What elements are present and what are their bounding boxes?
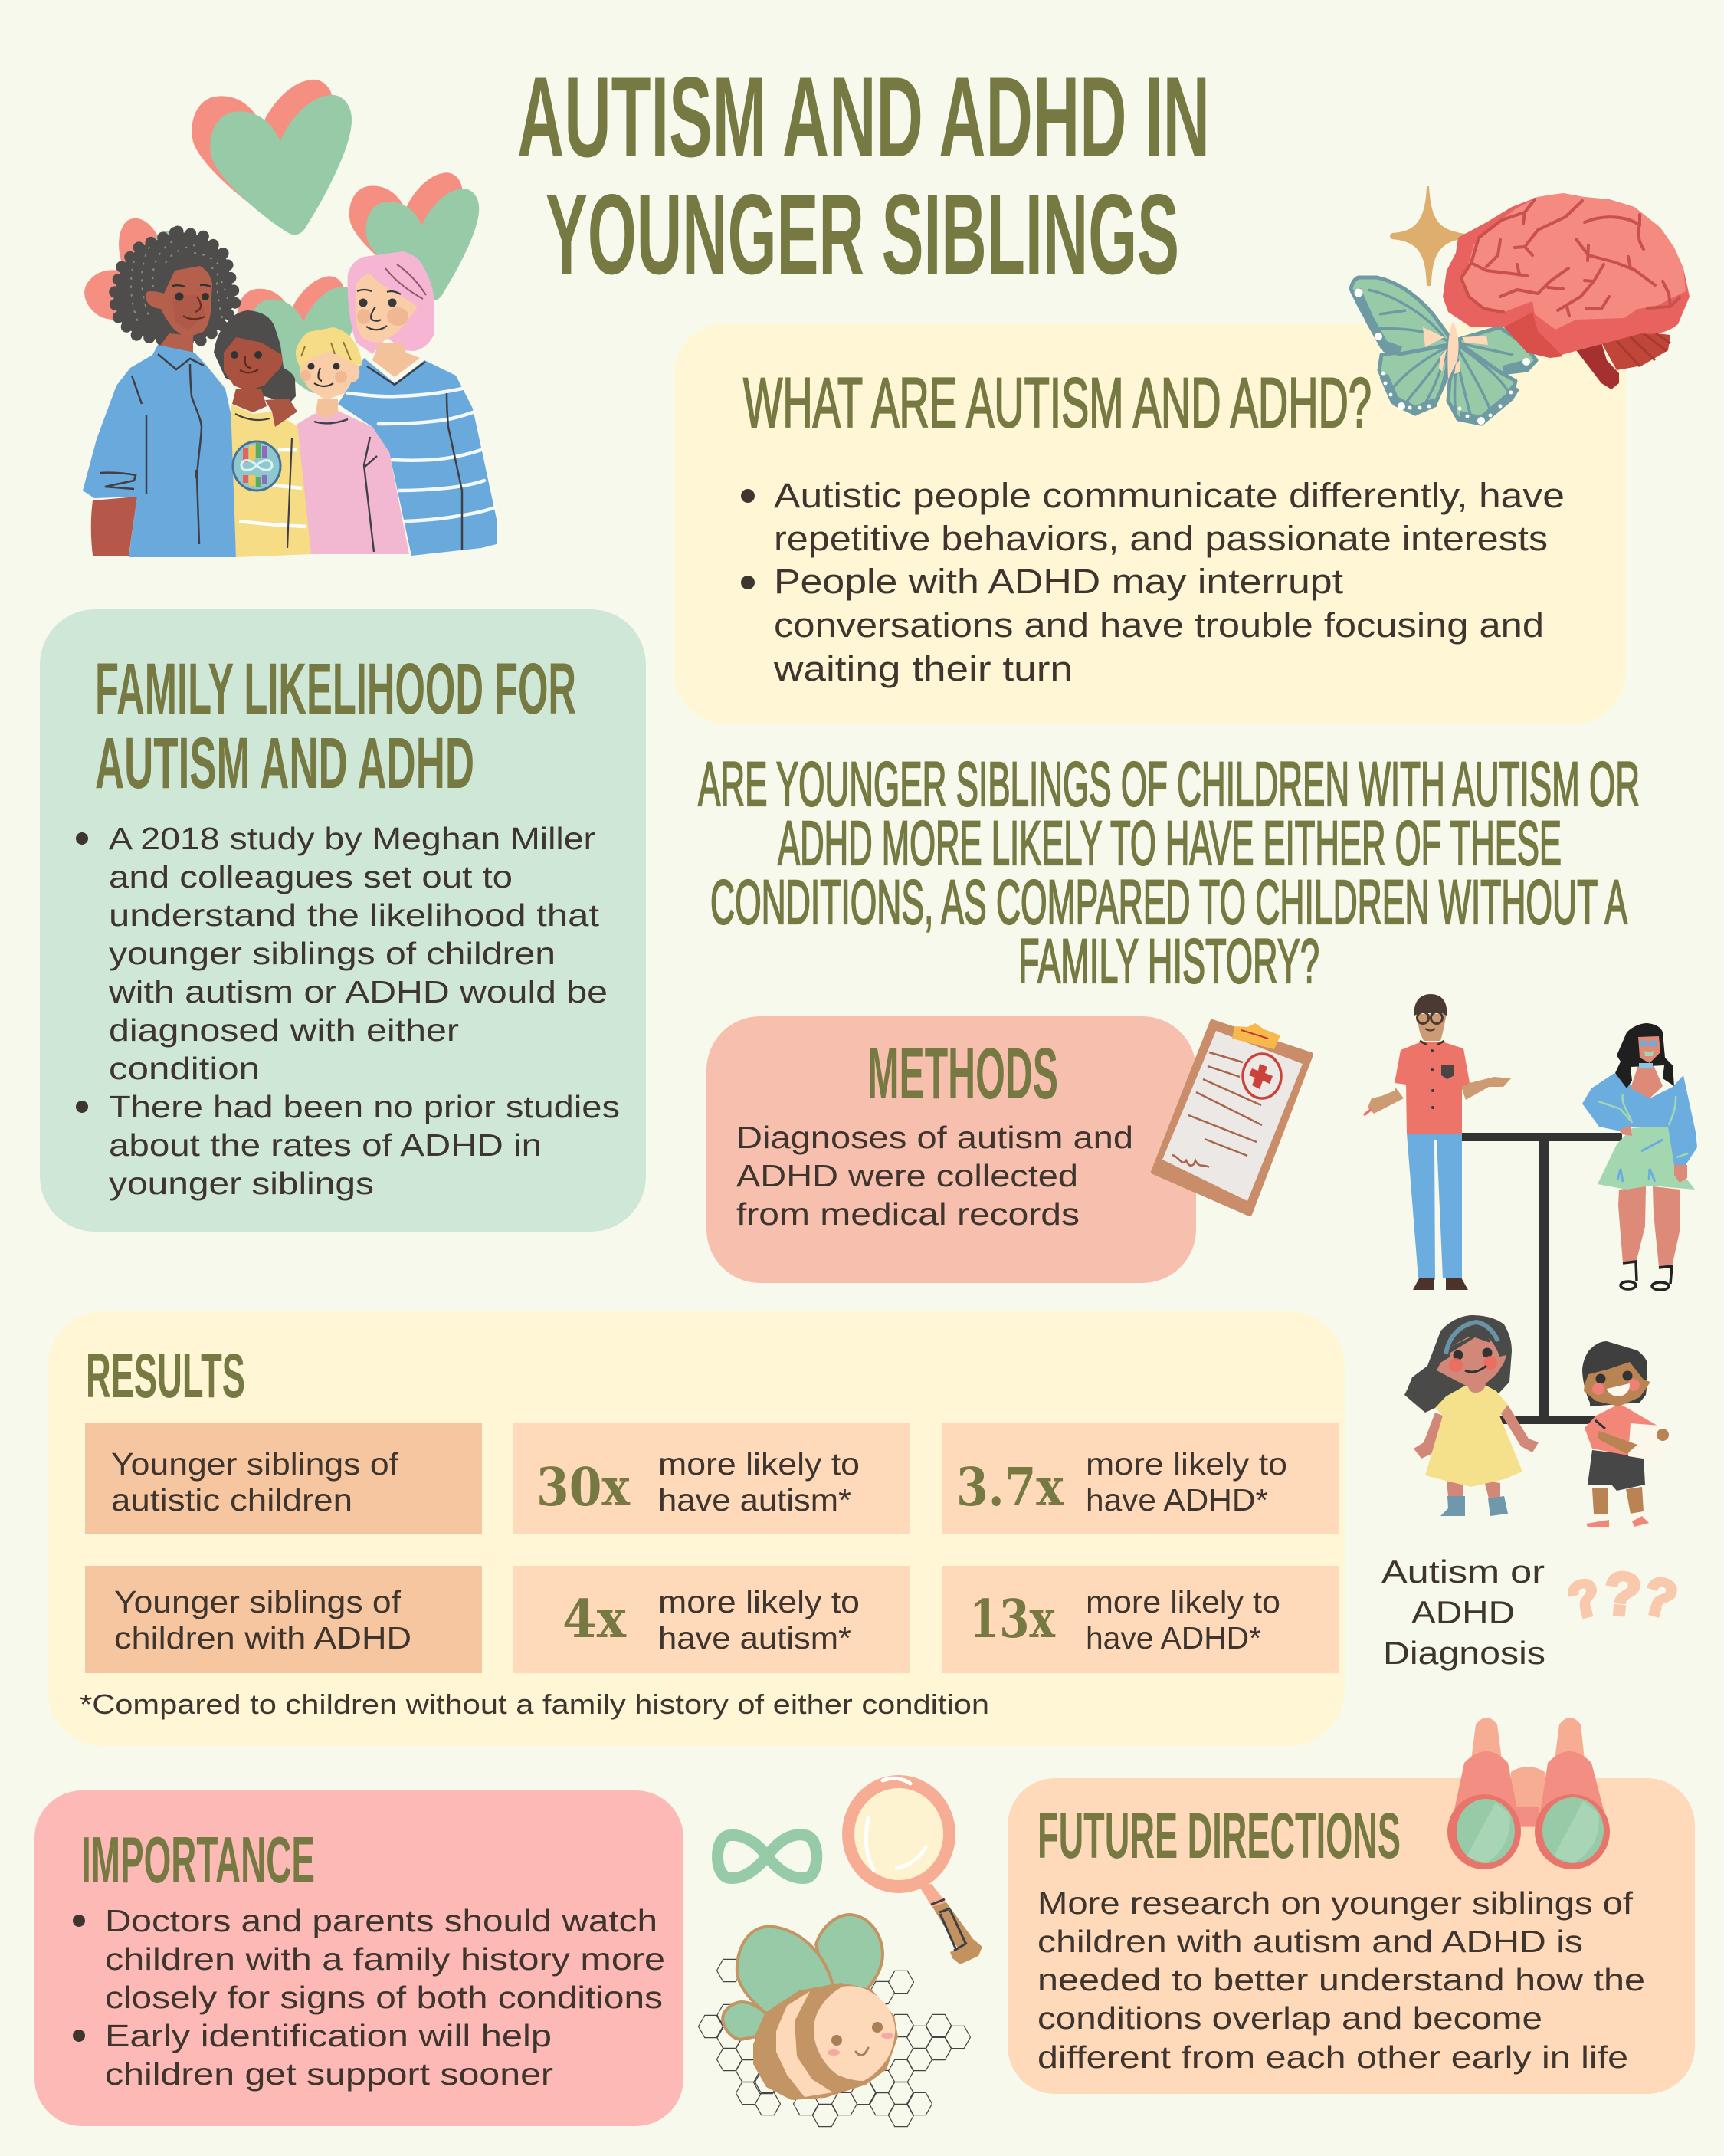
icon: magnifying glass [842, 1775, 982, 1964]
illustration: hearts and family [67, 80, 497, 557]
row: siblings of children with ADHD [85, 1566, 1339, 1673]
text block: bullets: condition [109, 1051, 260, 1086]
text block: bullets: with autism or ADHD would be [108, 974, 608, 1009]
icon: sparkle [1390, 186, 1466, 286]
row: siblings of autistic children [85, 1423, 1339, 1534]
icon: right heart [349, 172, 479, 300]
row: siblings of autistic children: autistic children [111, 1482, 352, 1518]
text block: bullets [741, 476, 1565, 688]
row: siblings of autistic children: 3.7x [956, 1457, 1064, 1518]
text block: bullets [76, 821, 620, 1201]
row: siblings of autistic children: Younger siblings of [111, 1446, 399, 1482]
panel: importance [34, 1790, 683, 2126]
heading: IMPORTANCE [81, 1824, 315, 1897]
text block: different from each other early in life [1037, 2040, 1628, 2075]
icon: question marks: ? [1562, 1567, 1606, 1629]
text block: bullets: Early identification will help [105, 2018, 552, 2053]
title: AUTISM AND ADHD IN [517, 53, 1210, 181]
heading: RESULTS [86, 1341, 245, 1411]
row: siblings of autistic children: have autism* [658, 1482, 851, 1518]
panel: results [48, 1311, 1345, 1746]
text block: ADHD were collected [736, 1158, 1078, 1193]
text block: bullets: closely for signs of both conditions [105, 1980, 663, 2015]
text block [736, 1120, 1133, 1232]
text block: bullets: younger siblings [109, 1166, 374, 1201]
icon: question marks: ? [1637, 1565, 1683, 1630]
icon: question marks [1562, 1558, 1683, 1630]
row: siblings of children with ADHD: Younger siblings of [114, 1584, 402, 1619]
panel: what are autism and ADHD [674, 323, 1626, 724]
row: siblings of children with ADHD: more likely to [658, 1584, 860, 1619]
figure: blond child [296, 327, 409, 554]
text block: bullets: children get support sooner [105, 2056, 553, 2092]
figure: mother [1582, 1023, 1697, 1290]
icon: clipboard [1153, 1022, 1311, 1214]
heading: research question [698, 750, 1640, 996]
text block: children with autism and ADHD is [1037, 1924, 1583, 1959]
row: siblings of autistic children: more likely to [658, 1446, 860, 1482]
text block: bullets: People with ADHD may interrupt [774, 562, 1344, 601]
heading: FAMILY LIKELIHOOD FOR [95, 648, 576, 730]
icon: centre heart [238, 276, 358, 393]
icon: binoculars [1447, 1718, 1610, 1869]
text block: needed to better understand how the [1037, 1962, 1645, 1997]
heading: METHODS [867, 1033, 1058, 1114]
text block: bullets: waiting their turn [773, 649, 1073, 688]
icon: bee [723, 1915, 898, 2100]
icon: question marks: ? [1601, 1558, 1644, 1629]
text block: bullets [73, 1903, 665, 2092]
label: autism or ADHD diagnosis: Diagnosis [1383, 1635, 1545, 1671]
panel: future directions [1008, 1778, 1695, 2094]
row: siblings of children with ADHD: more likely to [1086, 1584, 1280, 1619]
heading [95, 648, 576, 804]
row: siblings of autistic children: have ADHD* [1086, 1482, 1268, 1518]
figure: pink-haired woman [338, 251, 497, 556]
text block [1037, 1885, 1645, 2075]
text block: bullets: conversations and have trouble focusing and [774, 605, 1544, 645]
row: siblings of autistic children: more likely to [1086, 1446, 1287, 1482]
title: YOUNGER SIBLINGS [546, 170, 1179, 298]
icon: honeycomb behind bee [699, 1959, 970, 2127]
icon: left tilted heart [67, 212, 241, 368]
label: autism or ADHD diagnosis [1381, 1554, 1545, 1671]
panel: family likelihood [40, 609, 646, 1232]
heading: research question: FAMILY HISTORY? [1018, 927, 1319, 996]
text block: bullets: understand the likelihood that [109, 898, 600, 933]
row: siblings of children with ADHD: 13x [969, 1589, 1055, 1650]
text block: bullets: about the rates of ADHD in [109, 1127, 542, 1163]
text block: bullets: repetitive behaviors, and passionate interests [774, 519, 1548, 558]
figure: curly-haired mother [83, 231, 236, 557]
text block: Diagnoses of autism and [736, 1120, 1133, 1155]
text block: More research on younger siblings of [1037, 1885, 1634, 1921]
text block: bullets: Doctors and parents should watch [105, 1903, 657, 1938]
label: autism or ADHD diagnosis: Autism or [1381, 1554, 1545, 1590]
text block: bullets: children with a family history more [105, 1941, 665, 1977]
icon: infinity symbol [717, 1835, 817, 1878]
icon: butterfly [1351, 277, 1536, 425]
text block: bullets: diagnosed with either [109, 1012, 459, 1048]
text block: bullets: Autistic people communicate differently, have [774, 476, 1565, 515]
title [517, 53, 1210, 298]
diagram: family tree connector [1460, 1133, 1622, 1424]
row: siblings of autistic children: 30x [536, 1457, 630, 1518]
label: autism or ADHD diagnosis: ADHD [1411, 1594, 1515, 1630]
row: siblings of children with ADHD: children with ADHD [114, 1620, 411, 1656]
text block: bullets: younger siblings of children [109, 936, 556, 971]
text block: bullets: A 2018 study by Meghan Miller [109, 821, 595, 856]
row: siblings of children with ADHD: have autism* [658, 1620, 851, 1656]
row: siblings of children with ADHD: have ADHD* [1086, 1620, 1261, 1656]
heading: AUTISM AND ADHD [95, 723, 474, 804]
footnote: *Compared to children without a family history of either condition [80, 1688, 989, 1720]
icon: brain [1443, 193, 1690, 389]
row: siblings of children with ADHD: 4x [562, 1589, 626, 1650]
figure: daughter [1404, 1315, 1539, 1516]
text block: conditions overlap and become [1037, 2000, 1542, 2036]
figure: son [1582, 1341, 1669, 1527]
panel: methods [706, 1016, 1196, 1283]
figure: older child with rainbow badge [214, 310, 311, 557]
text block: bullets: and colleagues set out to [109, 859, 513, 894]
text block: bullets: There had been no prior studies [109, 1089, 620, 1124]
heading: FUTURE DIRECTIONS [1037, 1800, 1401, 1872]
text block: from medical records [736, 1196, 1080, 1232]
icon: large heart [192, 80, 352, 235]
figure: father [1364, 994, 1511, 1290]
